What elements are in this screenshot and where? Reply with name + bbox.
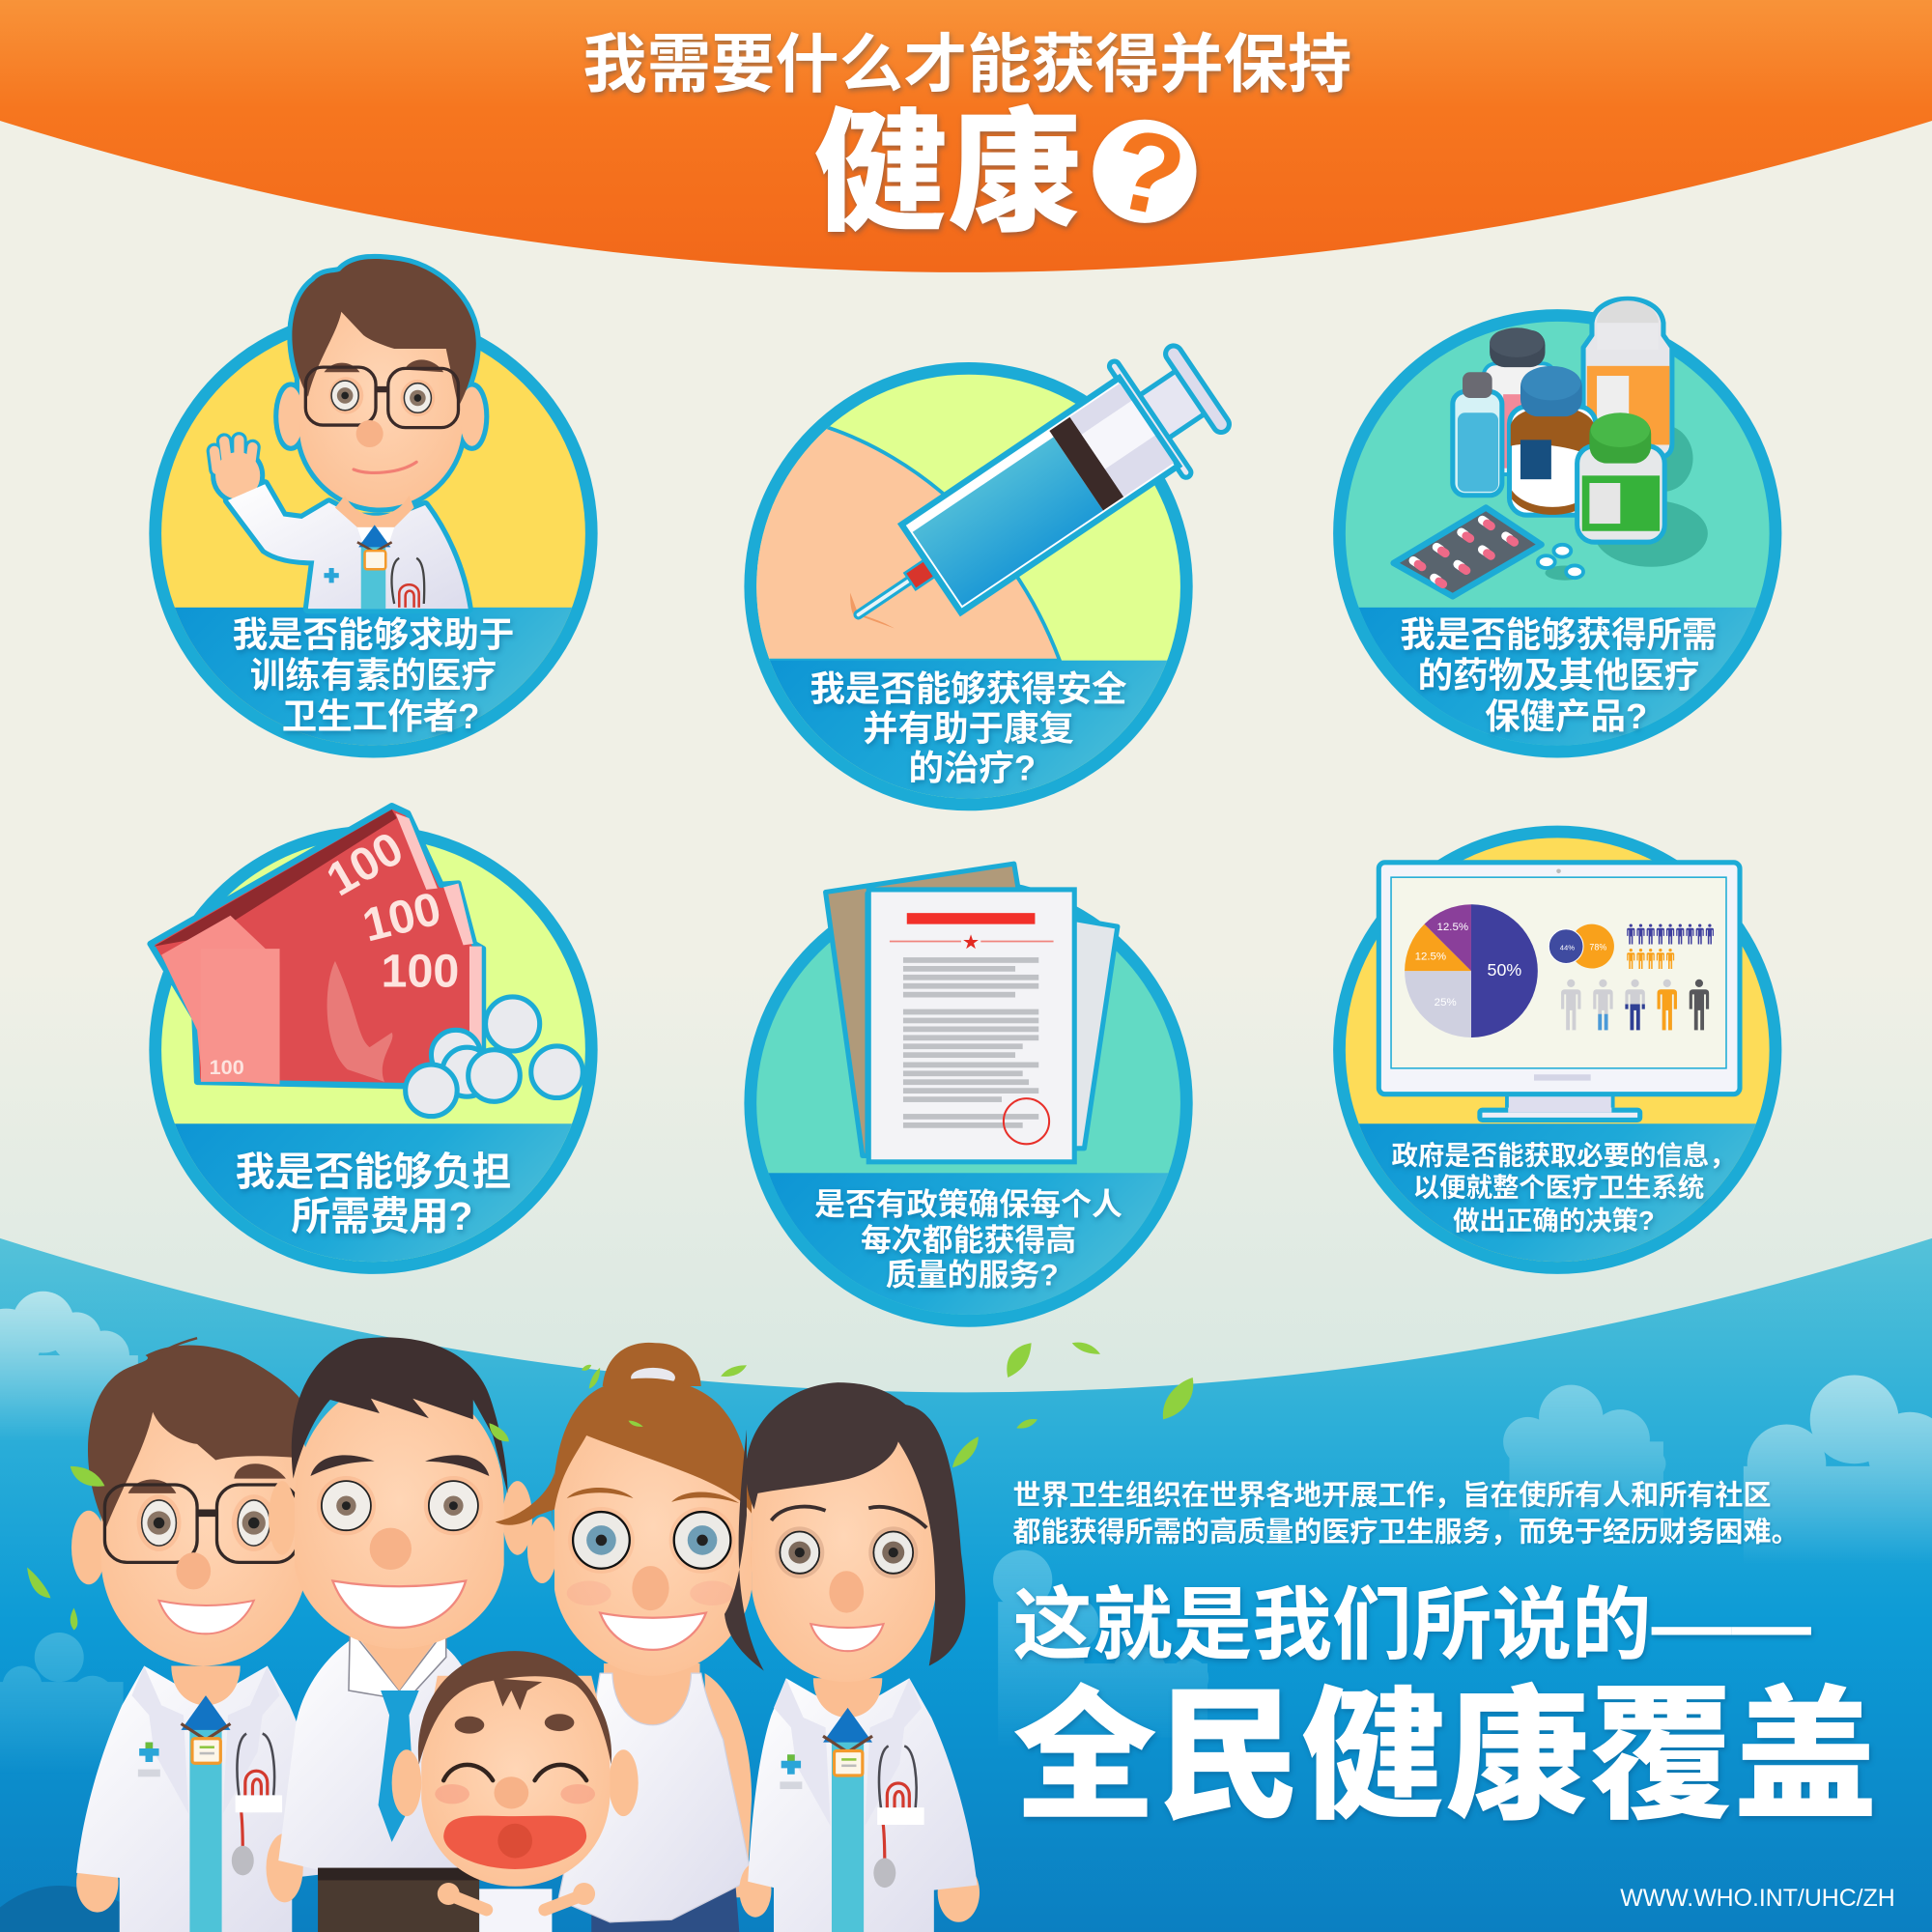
figure: doctor with glasses	[71, 1338, 335, 1932]
icon: dark-cap bottle	[1484, 327, 1555, 474]
text block: WHO statement: 世界卫生组织在世界各地开展工作，旨在使所有人和所有社区	[1012, 1479, 1772, 1511]
caption: safe treatment: 并有助于康复	[863, 709, 1074, 749]
caption: medicines: 保健产品?	[1485, 696, 1647, 736]
caption: safe treatment: 我是否能够获得安全	[810, 669, 1127, 709]
panel: affordability	[149, 806, 598, 1274]
caption band	[175, 1123, 572, 1262]
caption band	[770, 661, 1167, 798]
caption: medicines	[1400, 615, 1718, 736]
clouds and hills	[0, 1292, 1932, 1932]
icon: banknotes	[151, 806, 483, 1087]
icon: orange bottle	[1583, 298, 1672, 458]
arm skin	[756, 426, 1062, 663]
panel: safe treatment	[739, 327, 1242, 810]
icon: coins	[406, 997, 582, 1117]
caption: policies: 每次都能获得高	[861, 1223, 1076, 1258]
icon: drifting leaves	[721, 1343, 1193, 1429]
bottle shadows	[1545, 425, 1708, 581]
pictogram: small people	[1627, 924, 1714, 969]
caption: trained health workers: 训练有素的医疗	[250, 656, 497, 696]
pie chart	[1405, 904, 1538, 1037]
caption band	[769, 1173, 1169, 1315]
icon: loose tablets	[1538, 545, 1583, 578]
pie chart: 50%	[1488, 960, 1521, 980]
figure: man with tie	[267, 1337, 532, 1932]
venn circles: 78%	[1589, 942, 1606, 952]
panel: medicines	[1333, 298, 1781, 757]
pictogram: large people	[1561, 980, 1709, 1030]
caption: affordability: 我是否能够负担	[236, 1150, 511, 1194]
icon: small vial	[1453, 372, 1502, 496]
caption: information	[1391, 1140, 1736, 1236]
icon: monitor	[1378, 863, 1740, 1120]
pie chart: 25%	[1435, 997, 1457, 1009]
venn circles: 44%	[1560, 943, 1575, 952]
caption: trained health workers	[233, 615, 514, 736]
icon: doctor	[213, 259, 484, 609]
caption: information: 政府是否能获取必要的信息，	[1391, 1140, 1736, 1170]
icon: banknotes: 100	[318, 822, 412, 906]
caption: information: 做出正确的决策?	[1453, 1206, 1655, 1236]
title	[582, 29, 1351, 248]
caption: affordability: 所需费用?	[291, 1194, 472, 1238]
title: 健康	[813, 99, 1081, 248]
icon: envelope	[826, 864, 1019, 1155]
text block: WHO statement: 都能获得所需的高质量的医疗卫生服务，而免于经历财务困难。	[1012, 1517, 1800, 1548]
caption: policies: 质量的服务?	[886, 1257, 1059, 1292]
icon: banknotes: 100	[382, 946, 459, 998]
header orange banner	[0, 0, 1932, 272]
icon: brown bottle	[1509, 366, 1596, 515]
figure: baby	[392, 1651, 639, 1932]
caption: safe treatment	[810, 669, 1127, 787]
icon: back page	[1060, 918, 1118, 1149]
pie chart: 12.5%	[1415, 952, 1446, 963]
icon: banknotes: 100	[357, 883, 446, 952]
caption: safe treatment: 的治疗?	[909, 748, 1036, 787]
website url: WWW.WHO.INT/UHC/ZH	[1620, 1885, 1895, 1912]
caption band	[1358, 607, 1756, 746]
caption: policies: 是否有政策确保每个人	[814, 1187, 1122, 1222]
pie chart: 12.5%	[1437, 922, 1468, 933]
caption: policies	[814, 1187, 1122, 1292]
icon: foreground leaves	[27, 1365, 979, 1631]
caption: trained health workers: 卫生工作者?	[282, 696, 479, 736]
panel: policies	[744, 864, 1193, 1327]
caption: medicines: 的药物及其他医疗	[1418, 656, 1699, 696]
icon: syringe	[820, 327, 1242, 673]
panel: information	[1333, 826, 1781, 1274]
subheading: 这就是我们所说的——	[1012, 1579, 1811, 1669]
caption: medicines: 我是否能够获得所需	[1400, 615, 1718, 655]
icon: green bottle	[1577, 412, 1664, 542]
figure: female doctor	[724, 1382, 980, 1932]
venn circles	[1548, 924, 1614, 969]
caption band	[1333, 1123, 1781, 1274]
caption: affordability	[236, 1150, 511, 1238]
title: 我需要什么才能获得并保持	[582, 29, 1351, 100]
icon: banknotes: 100	[210, 1055, 244, 1079]
icon: policy document	[868, 890, 1074, 1162]
panel: trained health workers	[149, 259, 598, 757]
bottom sky background	[0, 1238, 1932, 1932]
caption band	[175, 607, 572, 746]
icon: policy document: ★	[963, 933, 979, 952]
icon: injection mark	[850, 593, 895, 629]
caption: information: 以便就整个医疗卫生系统	[1413, 1173, 1704, 1203]
main heading: universal health coverage: 全民健康覆盖	[1012, 1676, 1878, 1837]
caption: trained health workers: 我是否能够求助于	[233, 615, 514, 655]
icon: blister pack	[1394, 508, 1542, 596]
figure: woman with ponytail	[496, 1343, 754, 1932]
icon: question mark: ?	[1101, 103, 1195, 242]
text block: WHO statement	[1012, 1479, 1800, 1548]
